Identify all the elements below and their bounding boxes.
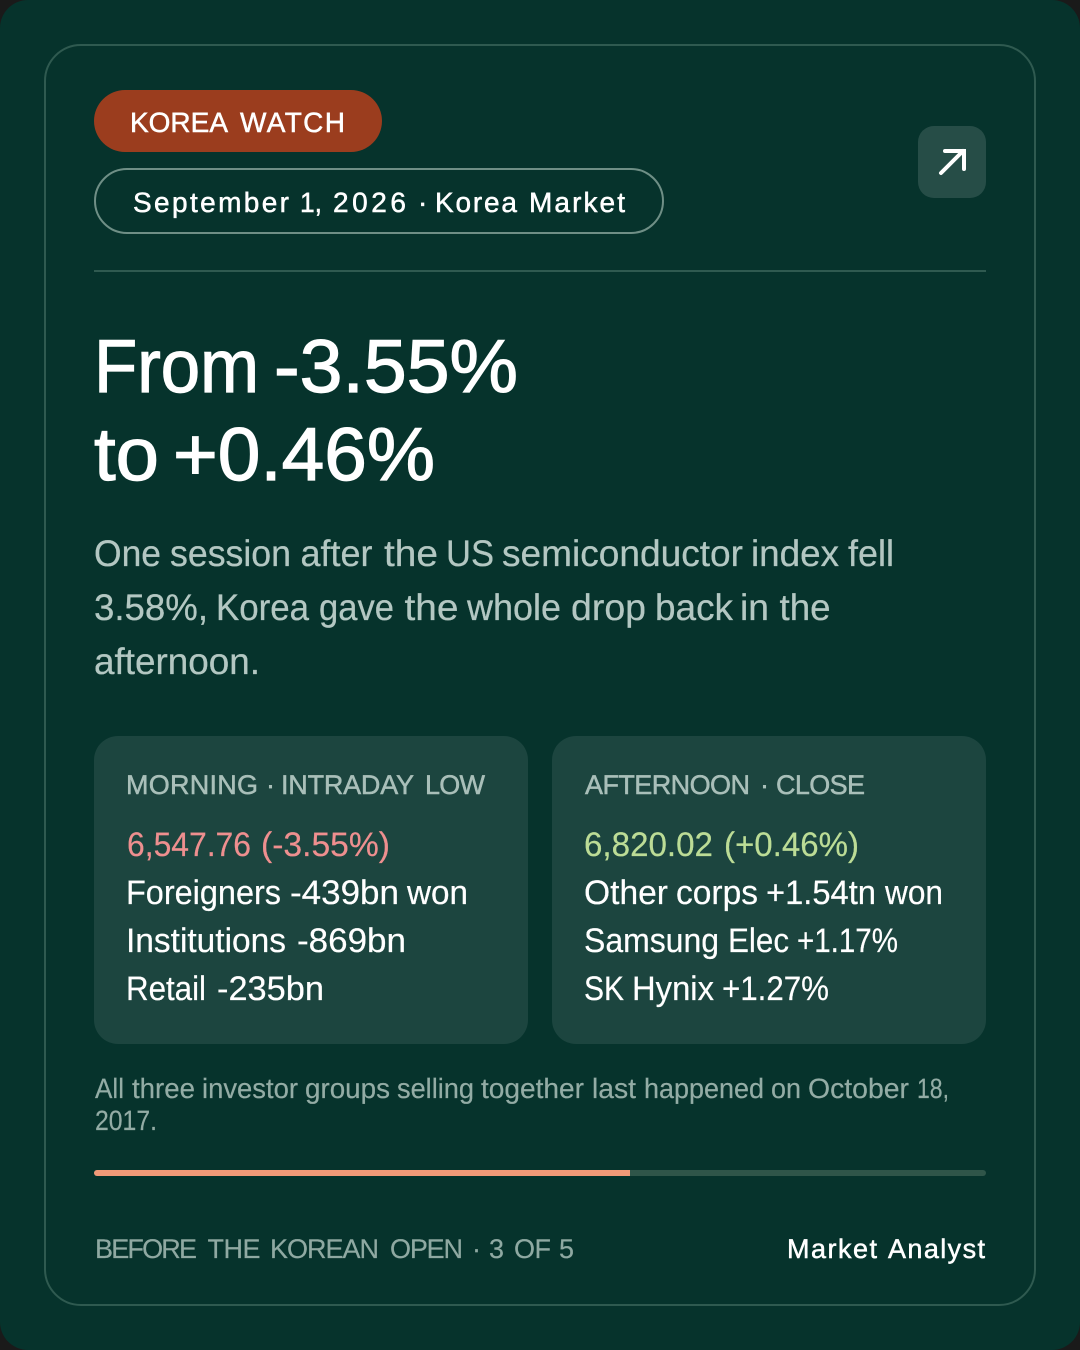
panel label: morning: · xyxy=(266,770,275,800)
panel label: morning: INTRADAY xyxy=(281,770,414,800)
morning flows: -439bn xyxy=(290,874,399,912)
footer series label: · xyxy=(472,1234,481,1264)
footnote: on xyxy=(771,1073,801,1104)
footer author xyxy=(787,1234,985,1264)
date pill: Market xyxy=(529,187,625,218)
afternoon flows: +1.17% xyxy=(797,922,898,960)
summary paragraph: One xyxy=(94,533,161,574)
panel: morning xyxy=(94,736,528,1044)
headline: -3.55% xyxy=(274,324,518,408)
footnote: groups xyxy=(305,1073,390,1104)
morning index value xyxy=(127,826,390,864)
headline: From xyxy=(94,324,259,408)
afternoon index value: 6,820.02 xyxy=(584,826,713,864)
summary paragraph: back xyxy=(655,587,733,628)
afternoon flows: corps xyxy=(676,874,758,912)
footnote xyxy=(95,1073,949,1136)
date pill: Korea xyxy=(435,187,517,218)
afternoon flows: Elec xyxy=(728,922,789,960)
footnote: 18, xyxy=(917,1073,949,1104)
panel label: morning xyxy=(126,770,486,800)
footnote: happened xyxy=(644,1073,764,1104)
afternoon flows: SK xyxy=(584,970,624,1008)
morning flows: -869bn xyxy=(297,922,406,960)
morning flows xyxy=(126,874,468,1008)
footer series label: 3 xyxy=(489,1234,504,1264)
panel label: afternoon: · xyxy=(760,770,769,800)
date pill: 1, xyxy=(300,187,322,218)
date pill: · xyxy=(418,187,427,218)
panel label: afternoon: AFTERNOON xyxy=(585,770,750,800)
summary paragraph: gave xyxy=(319,587,394,628)
morning flows: Retail xyxy=(126,970,206,1008)
summary paragraph: index xyxy=(751,533,839,574)
summary paragraph: after xyxy=(300,533,372,574)
summary paragraph: in xyxy=(740,587,769,628)
footer series label: 5 xyxy=(559,1234,574,1264)
afternoon flows: +1.27% xyxy=(722,970,829,1008)
panel label: morning: MORNING xyxy=(126,770,258,800)
summary paragraph: session xyxy=(170,533,291,574)
footnote: selling xyxy=(397,1073,474,1104)
summary paragraph: 3.58%, xyxy=(94,587,208,628)
footnote: 2017. xyxy=(95,1105,157,1136)
date pill: 2026 xyxy=(333,187,406,218)
afternoon flows: +1.54tn xyxy=(766,874,876,912)
progress bar xyxy=(94,1170,986,1176)
date pill xyxy=(95,169,663,233)
summary paragraph: fell xyxy=(848,533,894,574)
summary paragraph: semiconductor xyxy=(502,533,743,574)
panel: afternoon xyxy=(552,736,986,1044)
footer series label: OF xyxy=(514,1234,551,1264)
headline: to xyxy=(94,412,159,496)
summary paragraph: Korea xyxy=(216,587,309,628)
morning flows: Foreigners xyxy=(126,874,281,912)
tag: Korea Watch: WATCH xyxy=(240,107,345,138)
summary paragraph: afternoon. xyxy=(94,641,260,682)
summary paragraph: the xyxy=(404,587,458,628)
summary paragraph: the xyxy=(384,533,438,574)
footnote: three xyxy=(132,1073,195,1104)
icon: arrow up-right xyxy=(918,126,986,198)
headline xyxy=(94,324,518,496)
footer series label: OPEN xyxy=(390,1234,463,1264)
panel label: morning: LOW xyxy=(425,770,486,800)
afternoon flows: Other xyxy=(584,874,668,912)
date pill: September xyxy=(133,187,289,218)
morning index value: 6,547.76 xyxy=(127,826,251,864)
footer series label: KOREAN xyxy=(270,1234,379,1264)
footnote: All xyxy=(95,1073,124,1104)
morning flows: Institutions xyxy=(126,922,286,960)
summary paragraph: US xyxy=(446,533,494,574)
footnote: last xyxy=(592,1073,636,1104)
footnote: October xyxy=(808,1073,909,1104)
tag: Korea Watch: KOREA xyxy=(130,107,228,138)
footnote: investor xyxy=(202,1073,298,1104)
afternoon flows: Hynix xyxy=(632,970,714,1008)
afternoon flows: won xyxy=(884,874,943,912)
footnote: together xyxy=(481,1073,584,1104)
afternoon index value xyxy=(584,826,859,864)
footer series label xyxy=(95,1234,574,1264)
tag: Korea Watch xyxy=(94,90,382,152)
footer series label: BEFORE xyxy=(95,1234,197,1264)
summary paragraph: whole xyxy=(466,587,561,628)
summary paragraph xyxy=(94,533,894,682)
panel label: afternoon xyxy=(585,770,865,800)
morning flows: won xyxy=(406,874,468,912)
summary paragraph: drop xyxy=(571,587,646,628)
summary paragraph: the xyxy=(780,587,830,628)
footer author: Analyst xyxy=(888,1234,985,1264)
afternoon flows: Samsung xyxy=(584,922,719,960)
footer author: Market xyxy=(787,1234,877,1264)
afternoon flows xyxy=(584,874,943,1008)
panel label: afternoon: CLOSE xyxy=(776,770,865,800)
afternoon index value: (+0.46%) xyxy=(724,826,859,864)
footer series label: THE xyxy=(208,1234,260,1264)
morning index value: (-3.55%) xyxy=(261,826,390,864)
header divider xyxy=(94,270,986,272)
headline: +0.46% xyxy=(173,412,435,496)
morning flows: -235bn xyxy=(217,970,324,1008)
